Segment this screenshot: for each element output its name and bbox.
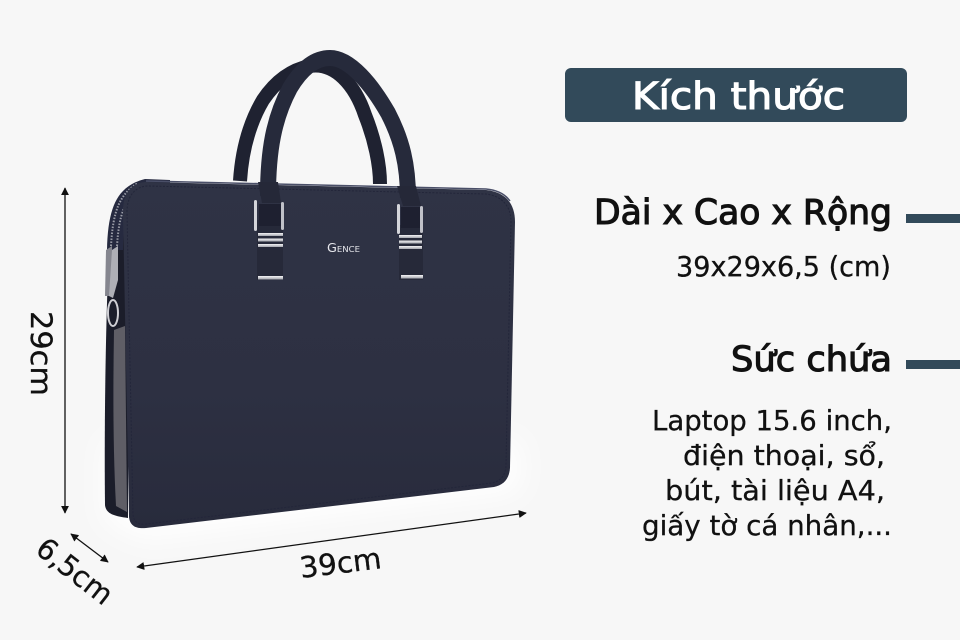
dimensions heading: Dài x Cao x Rộng (594, 193, 892, 233)
front panel (123, 182, 515, 528)
capacity description: bút, tài liệu A4, (665, 474, 885, 507)
capacity section (642, 340, 960, 542)
height label: 29cm (24, 311, 58, 396)
capacity accent bar (906, 360, 960, 369)
right handle buckle (397, 186, 423, 280)
width dimension (137, 513, 526, 585)
depth arrow (71, 534, 108, 562)
width arrow (137, 513, 526, 567)
zipper pulls (105, 246, 118, 326)
dimensions accent bar (906, 214, 960, 223)
soft glow behind product (105, 440, 520, 540)
back handle (240, 66, 380, 184)
zipper (107, 179, 170, 250)
capacity description: giấy tờ cá nhân,... (642, 509, 892, 542)
width label: 39cm (298, 541, 383, 585)
heading badge: Kích thước (565, 68, 907, 122)
brand logo: GENCE (327, 241, 360, 255)
top edge piping (146, 181, 510, 201)
capacity heading: Sức chứa (731, 340, 892, 380)
dimensions value: 39x29x6,5 (cm) (676, 250, 891, 283)
depth label: 6,5cm (30, 531, 120, 612)
depth dimension (30, 531, 120, 612)
height arrow (64, 188, 66, 513)
capacity description (642, 404, 892, 542)
capacity description: Laptop 15.6 inch, (652, 404, 892, 437)
back panel and gusset (105, 230, 128, 518)
product: briefcase (105, 58, 515, 528)
left handle buckle (254, 182, 284, 280)
heading badge: Kích thước: Kích thước (632, 75, 845, 118)
dimensions section (594, 193, 960, 283)
stitching (127, 186, 511, 524)
front handle (268, 58, 408, 198)
capacity description: điện thoại, sổ, (683, 439, 885, 472)
